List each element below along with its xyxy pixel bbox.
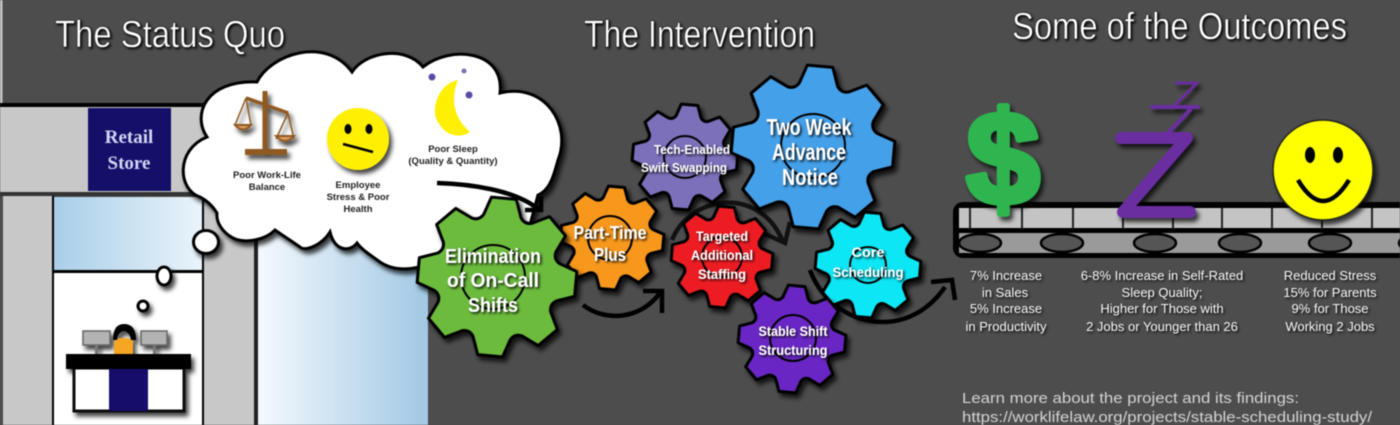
store sign: Store bbox=[108, 153, 150, 174]
outcome text: reduced stress: 9% for Those bbox=[1291, 301, 1369, 316]
outcome text: reduced stress bbox=[1283, 268, 1377, 334]
arrow: cloud to gears bbox=[437, 183, 541, 210]
gear: part-time plus: Part-Time bbox=[574, 223, 646, 243]
gear: elimination of on-call shifts: of On-Call bbox=[447, 270, 539, 292]
thought bubble dots bbox=[138, 230, 218, 311]
gear: two week advance notice: Advance bbox=[772, 139, 846, 165]
outcome text: sleep quality bbox=[1081, 268, 1243, 334]
gear: tech-enabled shift swapping: Swift Swapping bbox=[641, 160, 727, 175]
gear: two week advance notice: Notice bbox=[782, 164, 838, 190]
gear: two week advance notice: Two Week bbox=[766, 114, 852, 140]
caption: poor work-life balance: Balance bbox=[249, 182, 285, 193]
learn more text and link bbox=[962, 390, 1373, 425]
gear: targeted additional staffing: Targeted bbox=[696, 228, 748, 244]
outcome text: reduced stress: 15% for Parents bbox=[1283, 285, 1377, 300]
gear: core scheduling: Core bbox=[852, 244, 885, 260]
gear: stable shift structuring bbox=[734, 281, 850, 397]
gear: part-time plus bbox=[556, 182, 668, 294]
store sign bbox=[88, 108, 171, 191]
store sign: Retail bbox=[105, 127, 153, 148]
title: The Intervention: The Intervention bbox=[584, 14, 815, 56]
outcome text: sleep quality: Sleep Quality; bbox=[1122, 285, 1202, 300]
outcome text: reduced stress: Reduced Stress bbox=[1284, 268, 1377, 283]
outcome text: sleep quality: 2 Jobs or Younger than 26 bbox=[1086, 319, 1238, 334]
gear: targeted additional staffing bbox=[667, 202, 777, 312]
caption: employee stress: Health bbox=[343, 204, 373, 215]
caption: employee stress: Employee bbox=[336, 180, 380, 191]
caption: poor work-life balance: Poor Work-Life bbox=[233, 170, 301, 181]
gear: two week advance notice bbox=[725, 59, 901, 235]
gear: core scheduling: Scheduling bbox=[832, 264, 904, 280]
caption: employee stress: Stress & Poor bbox=[327, 192, 390, 203]
icon: sleep Z letters bbox=[1121, 83, 1198, 212]
caption: poor sleep: (Quality & Quantity) bbox=[408, 156, 498, 167]
outcome text: sales and productivity bbox=[966, 268, 1047, 334]
outcome text: sales and productivity: 7% Increase bbox=[970, 268, 1042, 283]
outcome text: sales and productivity: in Sales bbox=[982, 285, 1029, 300]
panel: retail store building bbox=[0, 0, 428, 425]
icon: scales bbox=[235, 91, 294, 154]
icon: dollar sign: $ bbox=[966, 85, 1040, 232]
arrow: orange to red bbox=[583, 291, 662, 316]
gear: elimination of on-call shifts: Elimination bbox=[445, 246, 541, 268]
icon: neutral face bbox=[327, 108, 389, 170]
reception desk with employee bbox=[66, 324, 191, 411]
outcome text: reduced stress: Working 2 Jobs bbox=[1285, 319, 1375, 334]
caption: poor sleep: Poor Sleep bbox=[428, 144, 478, 155]
learn more text and link: Learn more about the project and its findings: bbox=[962, 390, 1299, 407]
title: The Status Quo: The Status Quo bbox=[55, 14, 285, 56]
gear: elimination of on-call shifts bbox=[411, 191, 583, 363]
gear: core scheduling bbox=[811, 208, 925, 322]
outcome text: sales and productivity: 5% Increase bbox=[970, 301, 1042, 316]
title: Some of the Outcomes: Some of the Outcomes bbox=[1012, 6, 1347, 48]
outcome text: sleep quality: 6-8% Increase in Self-Rated bbox=[1081, 268, 1243, 283]
thought bubble cloud bbox=[183, 52, 562, 269]
arrow: over red gear bbox=[672, 203, 790, 243]
gear: tech-enabled shift swapping: Tech-Enabled bbox=[654, 142, 730, 157]
gear: stable shift structuring: Stable Shift bbox=[758, 323, 828, 339]
gear: stable shift structuring: Structuring bbox=[758, 342, 828, 358]
gear: elimination of on-call shifts: Shifts bbox=[468, 295, 518, 317]
outcome text: sales and productivity: in Productivity bbox=[966, 319, 1047, 334]
gear: tech-enabled shift swapping bbox=[628, 100, 742, 214]
caption: poor sleep bbox=[408, 144, 498, 167]
icon: moon and stars bbox=[428, 68, 472, 136]
gear: targeted additional staffing: Additional bbox=[691, 247, 753, 263]
conveyor belt bbox=[953, 202, 1400, 258]
caption: poor work-life balance bbox=[233, 170, 301, 193]
gear: part-time plus: Plus bbox=[594, 245, 626, 265]
outcome text: sleep quality: Higher for Those with bbox=[1100, 301, 1224, 316]
caption: employee stress bbox=[327, 180, 390, 215]
gear: targeted additional staffing: Staffing bbox=[698, 266, 746, 282]
icon: smiley face bbox=[1273, 120, 1373, 220]
arrow: around cyan gear bbox=[810, 270, 955, 322]
